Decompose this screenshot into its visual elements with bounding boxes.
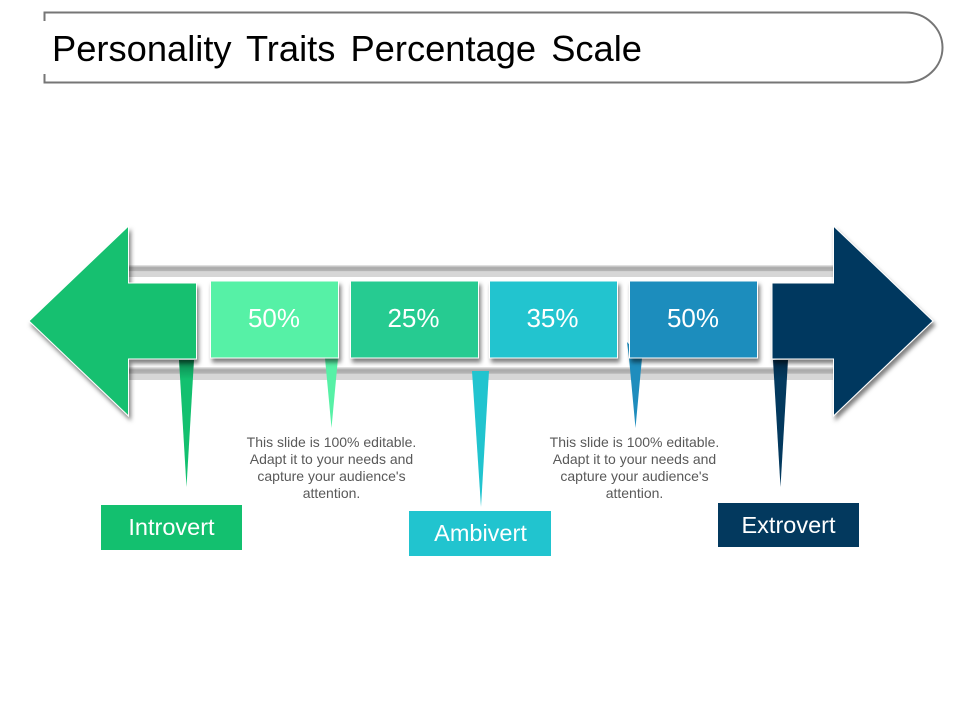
right arrow [772, 226, 933, 416]
pointer: second text note [627, 342, 642, 428]
pointer: first text note [325, 358, 338, 428]
box: 50%: 50% [667, 303, 719, 333]
label: introvert: Introvert [128, 514, 215, 540]
pointer: extrovert [773, 360, 788, 487]
text note: right: This slide is 100% editable. [550, 434, 719, 450]
text note: left: This slide is 100% editable. [247, 434, 416, 450]
title: Personality Traits Percentage Scale [52, 28, 642, 69]
text note: right: Adapt it to your needs and [553, 451, 716, 467]
text note: right: capture your audience's [560, 468, 709, 484]
label: extrovert [718, 503, 859, 547]
box: 50% [210, 281, 338, 358]
box: 50% [630, 281, 758, 358]
pointer: ambivert [472, 371, 489, 507]
box: 25%: 25% [387, 303, 440, 333]
scale bands [128, 265, 834, 380]
title frame [44, 12, 942, 83]
box: 25% [350, 281, 478, 358]
label: ambivert: Ambivert [434, 520, 527, 546]
label: extrovert: Extrovert [741, 512, 836, 538]
box: 50%: 50% [248, 303, 300, 333]
text note: left: attention. [303, 485, 360, 501]
label: ambivert [409, 511, 551, 556]
text note: left: Adapt it to your needs and [250, 451, 413, 467]
left arrow [29, 226, 196, 416]
box: 35%: 35% [526, 303, 579, 333]
pointer: introvert [179, 360, 194, 487]
box: 35% [490, 281, 618, 358]
text note: left: capture your audience's [257, 468, 406, 484]
label: introvert [101, 505, 242, 550]
text note: right: attention. [606, 485, 663, 501]
